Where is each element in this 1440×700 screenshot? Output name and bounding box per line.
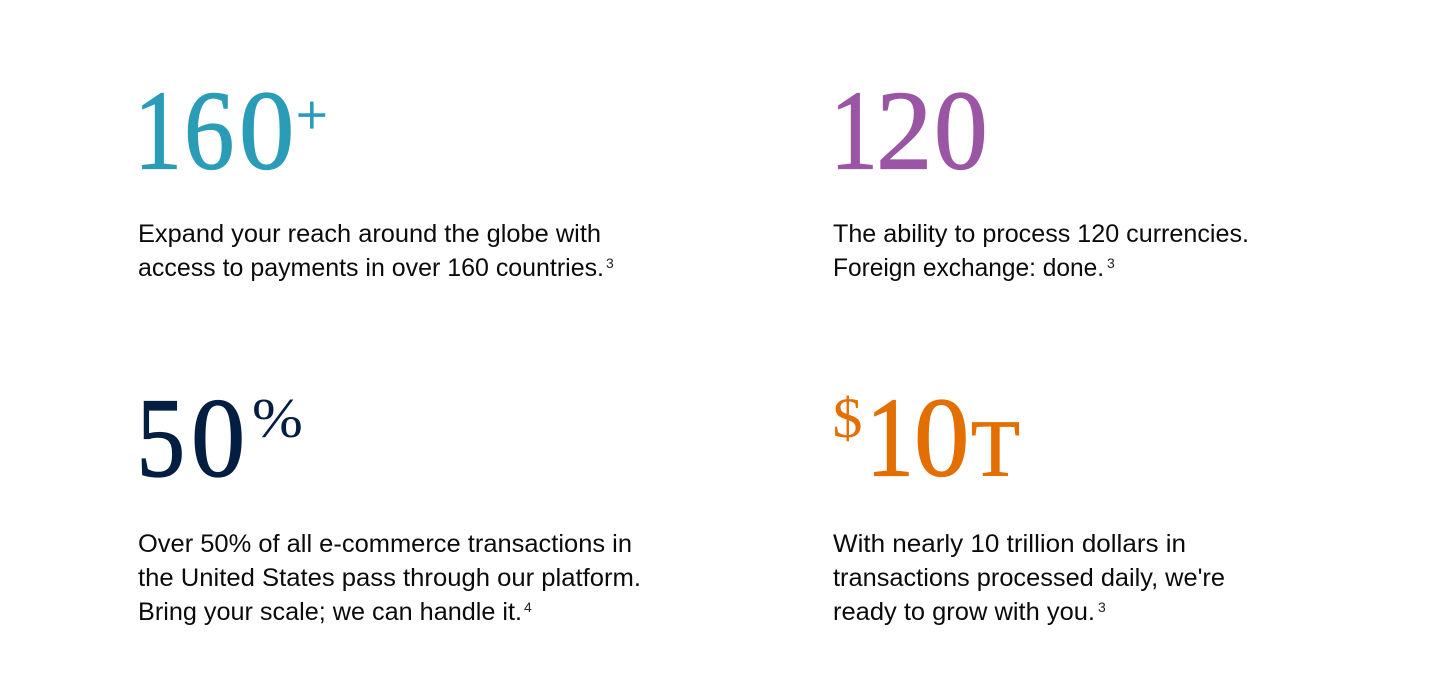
text block: transactions description: 3 <box>1098 599 1106 615</box>
text block: reach description <box>138 220 614 282</box>
big number: 50% <box>136 375 303 501</box>
panel: 160+ countries <box>134 68 614 282</box>
big number: $10T: 1 <box>866 375 914 500</box>
text block: currencies description <box>833 220 1249 282</box>
big number: 120 <box>830 68 988 194</box>
big number: 160+: 0 <box>239 69 294 194</box>
text block: transactions description: With nearly 10 trillion dollars in <box>833 530 1186 558</box>
text block: transactions description: ready to grow with you. <box>833 598 1095 626</box>
text block: reach description: 3 <box>606 255 614 271</box>
big number: $10T: T <box>971 406 1020 494</box>
text block: reach description: Expand your reach around the globe with <box>138 220 601 248</box>
text block: e-commerce description: Over 50% of all e-commerce transactions in <box>138 530 632 558</box>
big number: 120: 1 <box>830 68 878 193</box>
big number: 120: 0 <box>934 68 988 193</box>
text block: transactions description: transactions processed daily, we're <box>833 564 1225 592</box>
text block: currencies description: The ability to process 120 currencies. <box>833 220 1249 248</box>
big number: 160+: 1 <box>134 68 182 193</box>
big number: 50%: % <box>252 387 303 449</box>
big number: 160+ <box>134 68 328 194</box>
big number: $10T: 0 <box>914 376 969 501</box>
big number: 160+: + <box>296 85 328 147</box>
text block: e-commerce description: the United States pass through our platform. <box>138 564 641 592</box>
text block: e-commerce description: Bring your scale; we can handle it. <box>138 598 522 626</box>
text block: reach description: access to payments in over 160 countries. <box>138 254 604 282</box>
big number: $10T: $ <box>832 386 862 450</box>
panel: 50% of e-commerce <box>136 375 641 626</box>
big number: 120: 2 <box>876 68 932 194</box>
big number: $10T <box>832 375 1020 501</box>
panel: $10T daily <box>832 375 1225 626</box>
text block: currencies description: 3 <box>1107 255 1115 271</box>
panel: 120 currencies <box>830 68 1249 282</box>
text block: e-commerce description: 4 <box>524 599 532 615</box>
text block: transactions description <box>833 530 1225 626</box>
big number: 160+: 6 <box>184 69 234 194</box>
text block: currencies description: Foreign exchange: done. <box>833 254 1104 282</box>
big number: 50%: 5 <box>136 375 185 501</box>
text block: e-commerce description <box>138 530 641 626</box>
big number: 50%: 0 <box>191 375 245 500</box>
